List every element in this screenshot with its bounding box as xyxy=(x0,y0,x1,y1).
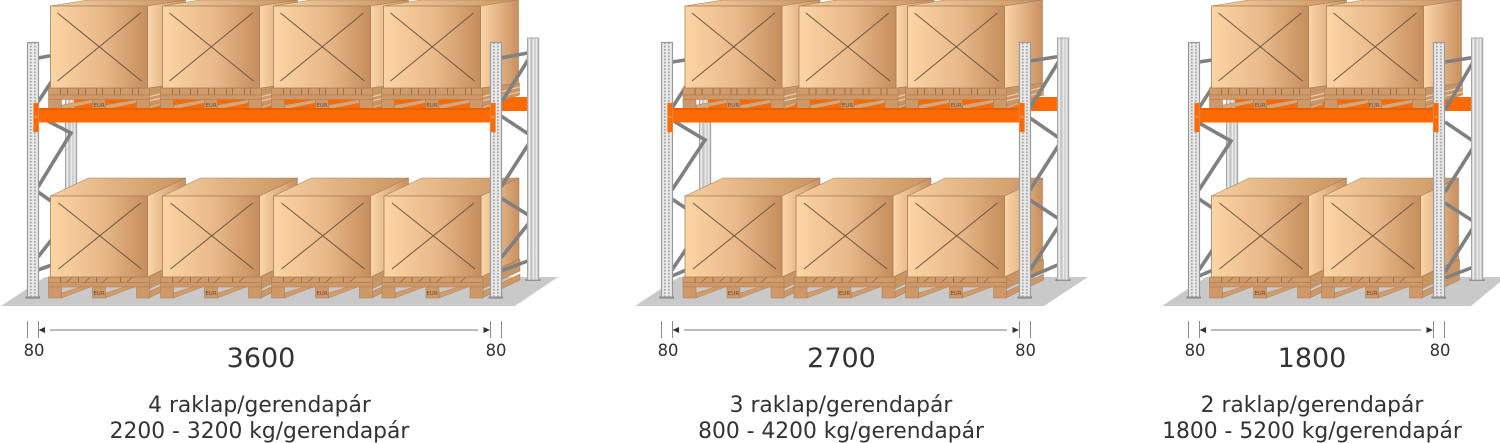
EUR pallet labels xyxy=(728,103,962,297)
capacity text xyxy=(698,393,984,443)
dimensions: 2700 xyxy=(807,343,876,374)
front uprights xyxy=(660,42,1032,298)
EUR pallet labels: EUR xyxy=(93,103,105,109)
dimensions: 1800 xyxy=(1278,343,1346,374)
dimensions xyxy=(24,341,506,374)
rear left upright xyxy=(1224,38,1240,281)
EUR pallet labels: EUR xyxy=(205,291,217,297)
upper pallets and boxes xyxy=(1210,0,1462,110)
EUR pallet labels: EUR xyxy=(426,291,438,297)
rear right upright xyxy=(526,38,540,281)
dimensions: 80 xyxy=(1185,341,1205,360)
upper pallets and boxes xyxy=(48,0,520,110)
EUR pallet labels: EUR xyxy=(1366,291,1378,297)
lower pallets and boxes xyxy=(48,178,520,298)
dimensions: 80 xyxy=(1015,341,1036,360)
front beam xyxy=(1199,108,1434,122)
EUR pallet labels: EUR xyxy=(1254,291,1266,297)
rack 1: 3600 mm, four pallets per beam pair xyxy=(1,0,558,443)
capacity text: 3 raklap/gerendapár xyxy=(730,393,952,418)
EUR pallet labels: EUR xyxy=(839,291,850,297)
floor xyxy=(1162,277,1500,306)
EUR pallet labels: EUR xyxy=(93,291,105,297)
EUR pallet labels: EUR xyxy=(426,103,438,109)
dimensions: 3600 xyxy=(227,343,295,374)
EUR pallet labels: EUR xyxy=(205,103,217,109)
left braces xyxy=(38,52,71,270)
dimensions: 80 xyxy=(1430,341,1450,360)
beam end plates xyxy=(34,103,496,132)
EUR pallet labels: EUR xyxy=(728,291,739,297)
front beam xyxy=(38,108,491,122)
upper pallets and boxes xyxy=(683,0,1044,110)
rear beam xyxy=(74,97,527,111)
right braces xyxy=(1445,57,1476,278)
dimension line xyxy=(662,321,1030,338)
EUR pallet labels: EUR xyxy=(728,103,739,109)
capacity text: 4 raklap/gerendapár xyxy=(148,393,371,418)
dimensions: 80 xyxy=(486,341,506,360)
rear beam xyxy=(708,97,1057,111)
rear beam xyxy=(1235,97,1471,111)
beam end plates xyxy=(668,103,1024,132)
EUR pallet labels: EUR xyxy=(1368,103,1380,109)
floor xyxy=(1,277,558,306)
capacity text xyxy=(1162,393,1462,443)
right braces xyxy=(501,52,533,271)
EUR pallet labels xyxy=(93,103,438,297)
EUR pallet labels: EUR xyxy=(950,291,962,297)
dimensions xyxy=(1185,341,1450,374)
rear left upright xyxy=(64,38,78,281)
lower pallets and boxes xyxy=(683,178,1044,298)
left braces xyxy=(1199,57,1232,276)
rack 3: 1800 mm, two pallets per beam pair xyxy=(1162,0,1500,443)
dimension line xyxy=(1188,321,1444,338)
front uprights xyxy=(1186,42,1446,298)
rear left upright xyxy=(698,38,712,281)
EUR pallet labels: EUR xyxy=(842,103,853,109)
capacity text: 2 raklap/gerendapár xyxy=(1201,393,1423,418)
dimension line xyxy=(28,321,502,338)
rack 2: 2700 mm, three pallets per beam pair xyxy=(635,0,1088,443)
dimensions: 80 xyxy=(658,341,678,360)
dimensions: 80 xyxy=(24,341,44,360)
floor xyxy=(635,277,1088,306)
beam end plates xyxy=(1194,103,1438,132)
capacity text xyxy=(110,393,409,443)
EUR pallet labels: EUR xyxy=(316,291,328,297)
EUR pallet labels: EUR xyxy=(316,103,328,109)
EUR pallet labels: EUR xyxy=(1254,103,1266,109)
lower pallets and boxes xyxy=(1210,178,1460,298)
EUR pallet labels: EUR xyxy=(950,103,962,109)
rear right upright xyxy=(1470,38,1484,281)
EUR pallet labels xyxy=(1254,103,1380,297)
front beam xyxy=(672,108,1020,122)
right braces xyxy=(1030,56,1062,277)
rear right upright xyxy=(1056,38,1070,281)
dimensions xyxy=(658,341,1036,374)
left braces xyxy=(672,57,705,276)
front uprights xyxy=(26,42,503,298)
